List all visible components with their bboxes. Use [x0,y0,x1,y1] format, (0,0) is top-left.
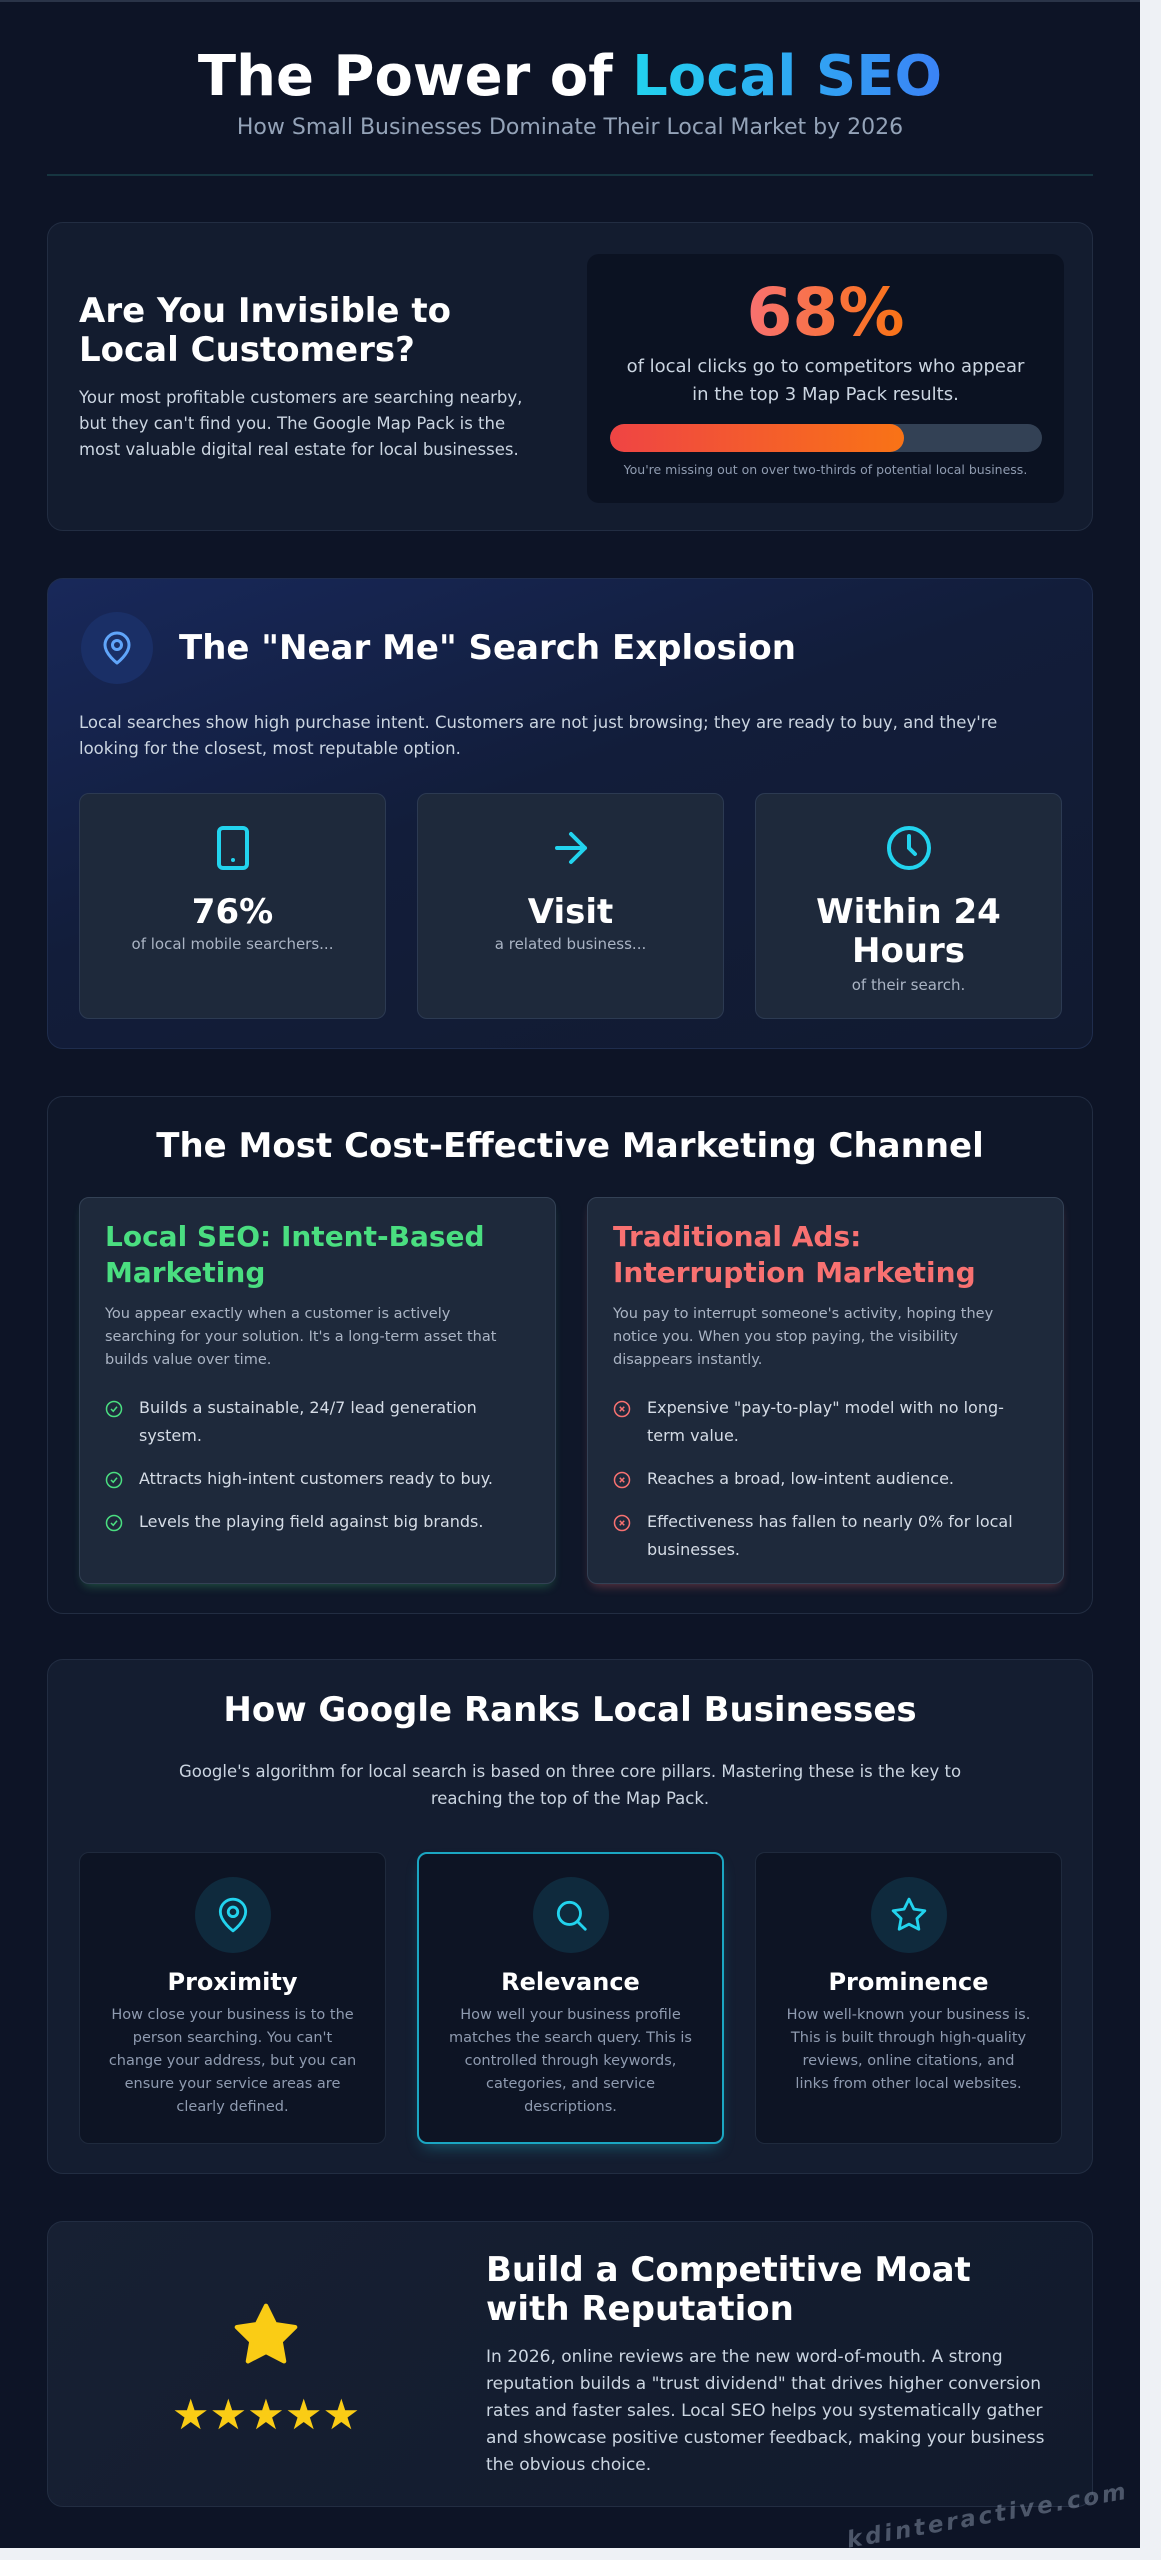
card: within 24 hours: of their search. [852,976,965,994]
panel: how google ranks [47,1659,1093,2174]
heading: moat: Build a Competitive Moat with Reputation [486,2250,971,2329]
card: visit [417,793,724,1019]
panel: cost-effective channel [47,1096,1093,1614]
text: moat paragraph: In 2026, online reviews are the new word-of-mouth. A strong reputation builds a "trust dividend" that drives higher conversion rates and faster sales. Local SEO helps you systematically gather and showcase positive customer feedback, making your business the obvious choice. [486,2347,1044,2475]
heading: near me: The "Near Me" Search Explosion [179,628,796,668]
card: traditional ads: Traditional Ads: Interruption Marketing [613,1220,976,1289]
text: invisible paragraph: Your most profitable customers are searching nearby, but they can't find you. The Google Map Pack is the most valuable digital real estate for local businesses. [79,388,522,459]
icon: location pin [81,612,153,684]
card: traditional ads: Expensive "pay-to-play" model with no long-​term value. [647,1398,1004,1445]
text: ranks intro: Google's algorithm for local search is based on three core pillars. Mastering these is the key to reaching the top of the Map Pack. [179,1762,961,1808]
heading: google ranks: How Google Ranks Local Businesses [223,1690,917,1730]
card: visit: Visit [528,892,613,932]
card: local seo [79,1197,556,1584]
card: 76% [79,793,386,1019]
card: traditional ads: Effectiveness has fallen to nearly 0% for local businesses. [647,1512,1013,1559]
card: local seo: Local SEO: Intent-Based Marketing [105,1220,485,1289]
text: near me paragraph: Local searches show high purchase intent. Customers are not just browsing; they are ready to buy, and they're looking for the closest, most reputable option. [79,713,997,758]
pillar: prominence: How well-known your business is. This is built through high-quality reviews, online citations, and links from other local websites. [787,2007,1030,2092]
heading: cost-effective: The Most Cost-Effective Marketing Channel [156,1126,984,1166]
card: local seo: Levels the playing field against big brands. [139,1512,483,1531]
card: traditional ads: Reaches a broad, low-intent audience. [647,1469,954,1488]
card: 76%: of local mobile searchers... [132,935,333,953]
pillar: relevance: Relevance [501,1968,640,1996]
heading: are you invisible: Are You Invisible to Local Customers? [79,291,451,370]
pillar: proximity: How close your business is to the person searching. You can't change your address, but you can ensure your service areas are clearly defined. [109,2007,356,2115]
icon: pin [195,1877,271,1953]
icon: phone [217,826,249,870]
panel: invisible to local customers [47,222,1093,531]
card: local seo: Attracts high-intent customers ready to buy. [139,1469,493,1488]
card: 76%: 76% [192,892,273,932]
subtitle: How Small Businesses Dominate Their Local Market by 2026 [237,115,903,140]
card: traditional ads [587,1197,1064,1584]
icon: search [533,1877,609,1953]
card: within 24 hours [755,793,1062,1019]
icon: five stars: ★★★★★ [172,2390,360,2439]
card: local seo: You appear exactly when a customer is actively searching for your solution. It's a long-term asset that builds value over time. [105,1306,496,1368]
icon: star [871,1877,947,1953]
stat number: 68% [746,274,904,351]
progress bar [610,424,1042,452]
pillar: prominence [755,1852,1062,2144]
card: local seo: Builds a sustainable, 24/7 lead generation system. [139,1398,477,1445]
card: visit: a related business... [495,935,646,953]
icon: big star [234,2304,298,2364]
pillar: proximity: Proximity [168,1968,297,1996]
bar caption: You're missing out on over two-thirds of potential local business. [624,462,1027,477]
pillar: prominence: Prominence [828,1968,989,1996]
icon: clock [887,826,931,870]
pillar: relevance: How well your business profile matches the search query. This is controlled through keywords, categories, and service descriptions. [449,2007,692,2115]
stat text: of local clicks go to competitors who appear in the top 3 Map Pack results. [627,356,1024,405]
panel: reputation moat [47,2221,1093,2507]
card: within 24 hours: Within 24 Hours [816,892,1001,971]
icon: arrow [555,832,588,864]
pillar: relevance [417,1852,724,2144]
stat box: 68% [587,254,1064,503]
pillar: proximity [79,1852,386,2144]
panel: near me search explosion [47,578,1093,1049]
watermark: kdinteractive.com [845,2478,1131,2554]
card: traditional ads: You pay to interrupt someone's activity, hoping they notice you. When you stop paying, the visibility disappears instantly. [613,1306,993,1368]
title: The Power of Local SEO [198,44,942,109]
